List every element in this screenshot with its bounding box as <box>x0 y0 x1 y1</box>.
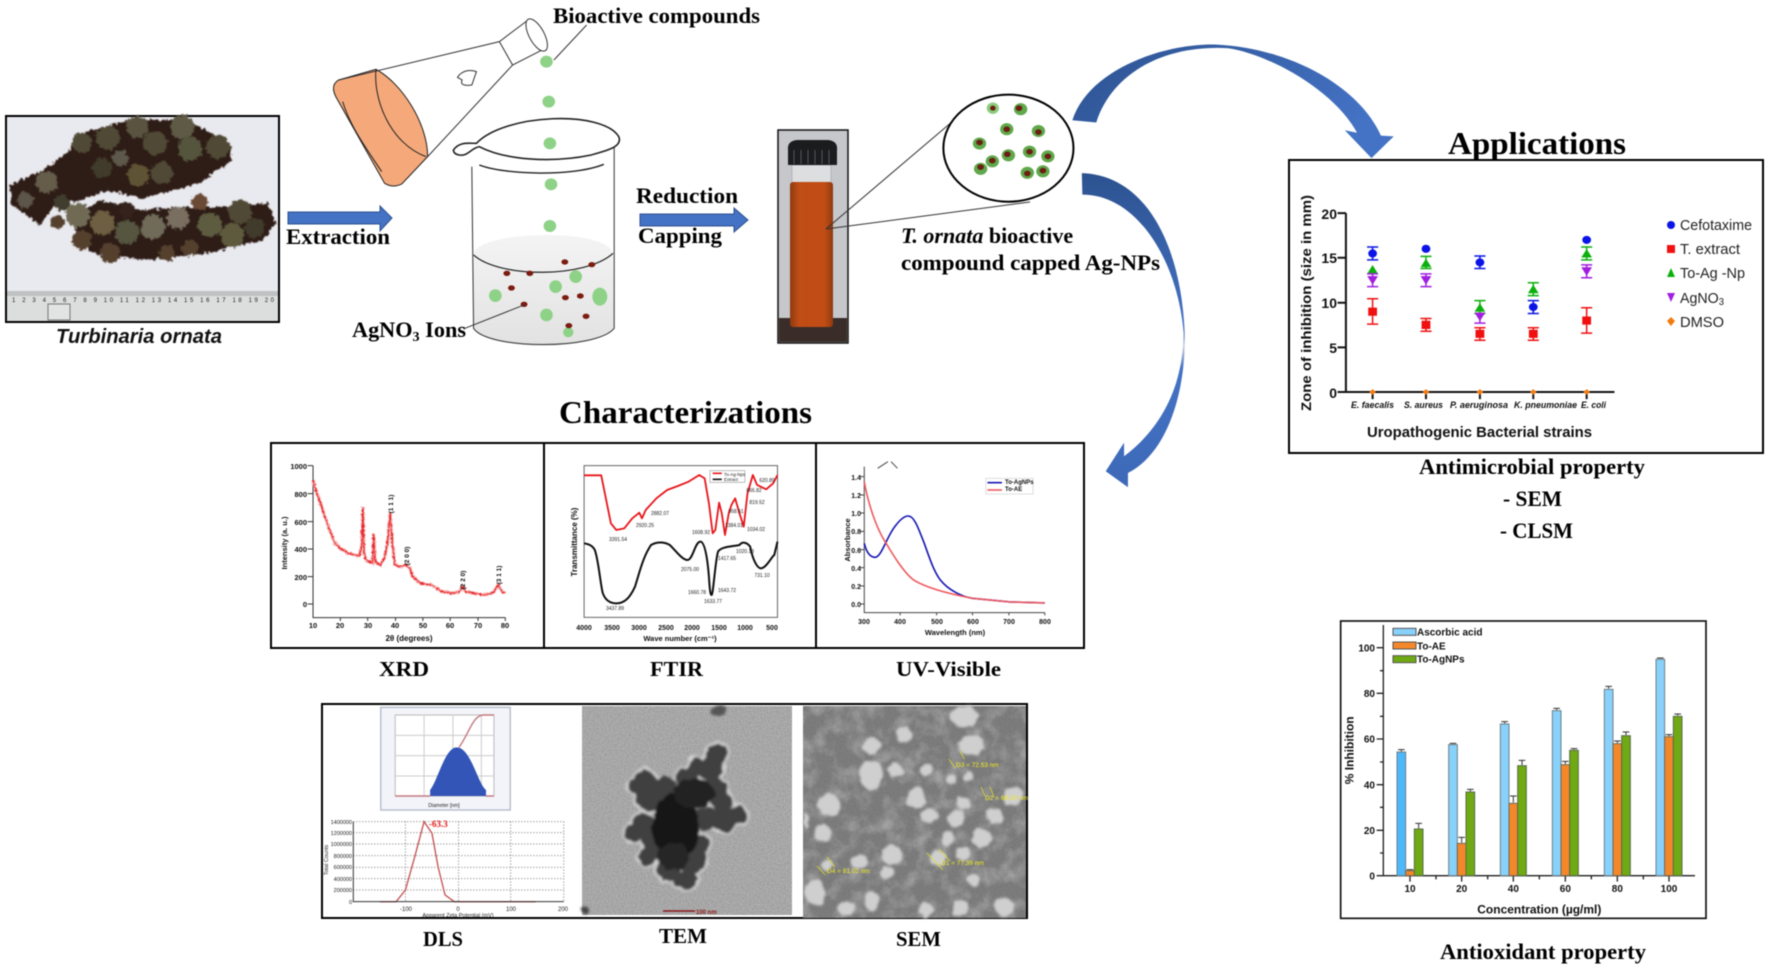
axis labels <box>1358 643 1375 882</box>
chart: FTIR <box>570 466 778 643</box>
legend: Cefotaxime <box>1680 217 1752 234</box>
chart: XRD: 40 <box>391 621 399 630</box>
chart: FTIR: Extract <box>724 477 739 482</box>
strain labels: S. aureus <box>1404 400 1443 410</box>
panel: antioxidant bar chart: 20 <box>1456 884 1468 895</box>
chart: FTIR: 3391.54 <box>609 537 627 543</box>
vial of orange nanoparticle solution <box>778 130 848 343</box>
panel: antioxidant bar chart <box>1341 621 1706 918</box>
chart: XRD: 200 <box>294 573 307 582</box>
chart: DLS size distribution and zeta potential: 200000 <box>334 888 352 894</box>
chart: UV-Visible: 0.2 <box>851 584 861 591</box>
chart: DLS size distribution and zeta potential: Apparent Zeta Potential (mV) <box>422 913 494 919</box>
legend: 3 <box>1719 297 1724 308</box>
axis labels: 80 <box>1364 689 1375 700</box>
axis labels: 20 <box>1364 826 1375 837</box>
chart: FTIR: 2920.25 <box>636 523 654 529</box>
legend: To-Ag -Np <box>1680 265 1745 282</box>
image: SEM micrograph: D1 = 77.39 nm <box>941 860 984 867</box>
chart: XRD: 2θ (degrees) <box>385 634 433 643</box>
chart: XRD: 800 <box>294 490 307 499</box>
axis labels: 100 <box>1358 643 1375 654</box>
chart: DLS size distribution and zeta potential: 1000000 <box>331 842 352 848</box>
panel: antioxidant bar chart: 60 <box>1560 884 1571 895</box>
series: AgNO3 <box>1367 265 1592 323</box>
label: capped nanoparticles: compound capped Ag-NPs <box>901 250 1160 275</box>
arrow: to characterizations <box>1082 173 1185 487</box>
axis labels: 0 <box>1369 871 1375 882</box>
chart: UV-Visible: 1.0 <box>851 511 861 518</box>
caption: antimicrobial property: - CLSM <box>1500 518 1573 543</box>
image: SEM micrograph: D3 = 72.53 nm <box>956 762 999 769</box>
strain labels: K. pneumoniae <box>1514 400 1577 410</box>
magnified nanoparticle circle <box>943 95 1073 202</box>
chart: XRD: (3 1 1) <box>496 566 503 584</box>
arrow: reduction capping <box>640 208 748 232</box>
chart: FTIR: To-Ag-Nps <box>724 472 746 477</box>
chart: DLS size distribution and zeta potential: 1200000 <box>331 831 352 837</box>
chart: DLS size distribution and zeta potential: 0 <box>456 907 460 913</box>
zoom lines from vial to nanoparticle view <box>826 121 1030 229</box>
label: reduction: Reduction <box>636 183 738 208</box>
chart: XRD: 600 <box>294 518 307 527</box>
label: extraction: Extraction <box>286 224 390 249</box>
species caption: Turbinaria ornata <box>56 326 222 348</box>
chart: DLS size distribution and zeta potential: 200 <box>558 907 569 913</box>
chart: XRD: 30 <box>364 621 372 630</box>
strain labels <box>1351 400 1606 410</box>
chart: FTIR: 866.82 <box>746 488 762 494</box>
chart: XRD: Intensity (a. u.) <box>280 516 289 569</box>
y axis ticks: 10 <box>1321 295 1337 311</box>
chart: DLS size distribution and zeta potential: 800000 <box>334 854 352 860</box>
axis labels: 40 <box>1364 780 1375 791</box>
series: T. extract <box>1367 299 1592 340</box>
panel: characterization charts frame <box>271 443 1084 648</box>
chart: UV-Visible: 0.0 <box>851 602 861 609</box>
x axis title: Uropathogenic Bacterial strains <box>1367 424 1592 441</box>
y axis ticks: 20 <box>1321 206 1337 222</box>
chart: UV-Visible: 0.8 <box>851 529 861 536</box>
caption: UV-Visible: UV-Visible <box>896 657 1001 681</box>
y axis ticks <box>1321 206 1337 401</box>
series: DMSO <box>1369 389 1590 395</box>
flask pouring bioactive compounds <box>333 18 552 186</box>
chart: FTIR: 4000 <box>576 625 592 632</box>
axis labels: 60 <box>1364 735 1375 746</box>
chart: DLS size distribution and zeta potential: Diameter [nm] <box>428 803 460 809</box>
chart: FTIR: 1500 <box>711 625 727 632</box>
panel: antioxidant bar chart: 100 <box>1661 884 1678 895</box>
chart: XRD: 70 <box>474 621 482 630</box>
legend: T. extract <box>1680 241 1741 258</box>
chart: FTIR: 1608.92 <box>692 530 710 536</box>
caption: DLS: DLS <box>423 927 463 951</box>
chart: FTIR: 1034.02 <box>747 527 765 533</box>
chart: FTIR: 1000 <box>737 625 753 632</box>
error bars <box>1398 658 1681 870</box>
chart: FTIR: 2075.00 <box>681 567 699 573</box>
chart: UV-Visible: To-AgNPs <box>1005 480 1034 486</box>
chart: FTIR: 731.10 <box>754 573 770 579</box>
chart: UV-Visible: 0.4 <box>851 566 861 573</box>
zeta plot <box>353 822 564 902</box>
chart: DLS size distribution and zeta potential: Total Counts <box>324 844 330 875</box>
series: cefotaxime <box>1367 236 1591 313</box>
photo: Turbinaria ornata seaweed <box>6 115 279 322</box>
panel: antioxidant bar chart: 40 <box>1508 884 1519 895</box>
chart: XRD: 0 <box>303 600 307 609</box>
chart: DLS size distribution and zeta potential: 100 <box>506 907 517 913</box>
chart: DLS size distribution and zeta potential: -63.3 <box>429 819 448 829</box>
chart: FTIR: 2882.07 <box>651 511 669 517</box>
image: SEM micrograph <box>803 706 1028 918</box>
image: TEM micrograph <box>581 705 792 916</box>
chart: DLS size distribution and zeta potential: 400000 <box>334 877 352 883</box>
chart: FTIR: 1660.78 <box>688 590 706 596</box>
caption: FTIR: FTIR <box>650 657 704 681</box>
label: bioactive compounds: Bioactive compounds <box>553 3 760 28</box>
chart: FTIR: 1384.01 <box>725 523 743 529</box>
y axis ticks: 15 <box>1321 250 1337 266</box>
chart: FTIR: 3437.89 <box>606 606 624 612</box>
series: ascorbic acid <box>1397 659 1665 876</box>
chart: UV-Visible <box>843 462 1051 637</box>
chart: UV-Visible: 500 <box>931 619 943 626</box>
chart: DLS size distribution and zeta potential: 1400000 <box>331 820 352 826</box>
chart: DLS size distribution and zeta potential: -100 <box>400 907 413 913</box>
caption: antimicrobial property: - SEM <box>1503 486 1562 511</box>
chart: XRD: 50 <box>419 621 427 630</box>
series: To-AE <box>1406 737 1673 876</box>
chart: FTIR: 1643.72 <box>718 588 736 594</box>
chart: FTIR: 500 <box>766 625 778 632</box>
chart: UV-Visible: 700 <box>1003 619 1015 626</box>
strain labels: P. aeruginosa <box>1450 400 1508 410</box>
chart: UV-Visible: Wavelength (nm) <box>925 628 986 637</box>
chart: FTIR: 2500 <box>658 625 674 632</box>
chart: XRD: 400 <box>294 545 307 554</box>
chart: FTIR: Wave number (cm⁻¹) <box>643 634 717 643</box>
y axis ticks: 0 <box>1329 385 1337 401</box>
label: silver nitrate ions: 3 <box>413 330 420 345</box>
panel: antioxidant bar chart: % Inhibition <box>1342 716 1356 784</box>
panel: microscopy frame <box>322 704 1027 918</box>
chart: FTIR: 3000 <box>631 625 647 632</box>
chart: UV-Visible: To-AE <box>1005 487 1022 493</box>
chart: FTIR: 1417.65 <box>718 556 736 562</box>
chart: XRD: 20 <box>336 621 344 630</box>
label: capped nanoparticles: T. ornata bioactive <box>901 223 1073 248</box>
photo: Turbinaria ornata seaweed: 1 2 3 4 5 6 7 8 9 10 11 12 13 14 15 16 17 18 19 20 <box>12 298 275 304</box>
caption: antioxidant property: Antioxidant property <box>1440 939 1646 964</box>
chart: FTIR: 1633.77 <box>704 599 722 605</box>
image: SEM micrograph: D2 = 68.02 nm <box>985 795 1028 802</box>
chart: FTIR: 1020.13 <box>736 549 754 555</box>
image: SEM micrograph: D4 = 81.02 nm <box>827 868 870 875</box>
legend: DMSO <box>1680 314 1724 331</box>
chart: XRD <box>280 462 509 643</box>
label: silver nitrate ions: Ions <box>420 317 466 342</box>
chart: XRD: 1000 <box>290 462 307 471</box>
chart: UV-Visible: 0.6 <box>851 548 861 555</box>
chart: FTIR: Transmittance (%) <box>570 507 579 576</box>
chart: XRD: 80 <box>501 621 509 630</box>
chart: FTIR: 3500 <box>604 625 620 632</box>
silver ions <box>503 259 595 328</box>
chart: UV-Visible: 600 <box>967 619 979 626</box>
chart: UV-Visible: 1.4 <box>851 475 861 482</box>
chart: UV-Visible: Absorbance <box>843 518 852 562</box>
legend <box>1667 217 1752 331</box>
caption: XRD: XRD <box>379 657 429 681</box>
beaker with silver nitrate solution <box>453 25 619 346</box>
heading: characterizations: Characterizations <box>559 394 812 430</box>
chart: FTIR: 819.52 <box>749 500 765 506</box>
y axis ticks: 5 <box>1329 340 1337 356</box>
chart: UV-Visible: 400 <box>894 619 906 626</box>
falling green drops <box>489 56 607 337</box>
caption: SEM: SEM <box>896 927 941 951</box>
panel: antioxidant bar chart: Concentration (µg/ml) <box>1477 902 1601 916</box>
chart: FTIR: 2000 <box>684 625 700 632</box>
chart: DLS size distribution and zeta potential: 600000 <box>334 865 352 871</box>
label: silver nitrate ions: AgNO <box>352 317 412 342</box>
legend: AgNO <box>1680 290 1721 307</box>
chart: DLS size distribution and zeta potential: 0 <box>349 900 352 906</box>
legend: To-AgNPs <box>1417 655 1465 666</box>
chart: FTIR: 958.61 <box>728 509 744 515</box>
legend: Ascorbic acid <box>1417 628 1482 639</box>
chart: XRD: (2 0 0) <box>404 547 411 565</box>
y axis title: Zone of inhibition (size in mm) <box>1298 195 1314 411</box>
image: TEM micrograph: 100 nm <box>696 910 717 916</box>
caption: antimicrobial property <box>1419 454 1645 543</box>
label: capping: Capping <box>638 223 722 248</box>
caption: antimicrobial property: Antimicrobial property <box>1419 454 1645 479</box>
arrow: extraction <box>288 206 392 231</box>
chart: UV-Visible: 1.2 <box>851 493 861 500</box>
legend <box>1393 628 1482 666</box>
chart: UV-Visible: 300 <box>858 619 870 626</box>
series: To-AgNPs <box>1414 716 1682 876</box>
panel: antioxidant bar chart: 10 <box>1404 884 1416 895</box>
panel: antimicrobial scatter chart <box>1289 160 1763 453</box>
series: To-Ag-Np <box>1368 247 1592 313</box>
caption: TEM: TEM <box>659 924 707 948</box>
label: capped nanoparticles <box>901 223 1160 275</box>
strain labels: E. faecalis <box>1351 400 1394 410</box>
inset: size distribution <box>381 707 510 810</box>
chart: XRD: 10 <box>309 621 317 630</box>
chart: DLS size distribution and zeta potential <box>324 707 569 919</box>
heading: applications: Applications <box>1448 125 1626 161</box>
chart: XRD: 60 <box>446 621 454 630</box>
chart: XRD: (2 2 0) <box>460 571 467 589</box>
arrow: to applications <box>1072 45 1394 158</box>
legend: To-AE <box>1417 641 1446 652</box>
panel: antioxidant bar chart: 80 <box>1612 884 1623 895</box>
strain labels: E. coli <box>1581 400 1606 410</box>
chart: UV-Visible: 800 <box>1039 619 1051 626</box>
chart: FTIR: 620.89 <box>759 478 775 484</box>
chart: XRD: (1 1 1) <box>388 495 395 513</box>
